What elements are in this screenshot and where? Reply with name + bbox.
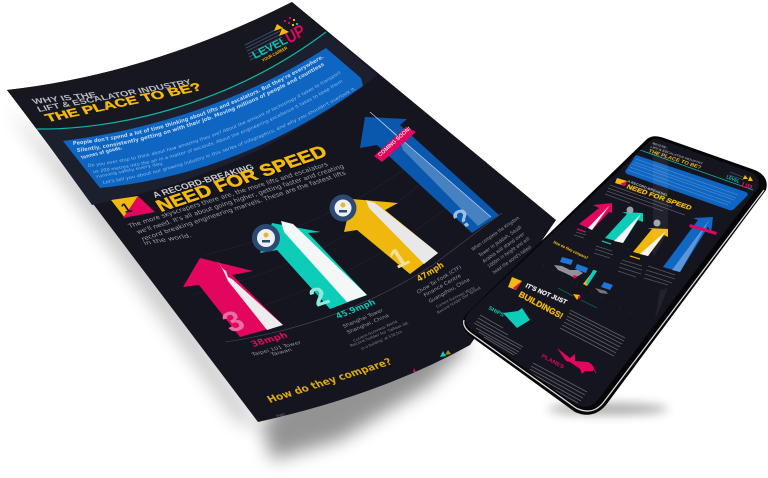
intro small text: us 200 metres into the air in a matter of seconds. About the engineering excellence it takes to keep them [93,80,342,173]
chart: blue arrow, Kingdom Tower: ? [446,202,479,235]
screen heading: compare: How do they compare? [552,240,590,260]
heading: why is the: LIFT & ESCALATOR INDUSTRY [35,77,194,114]
screen logo: UP [740,181,754,192]
screen body lines [605,185,685,215]
chart: teal arrow, Shanghai Tower: 2 [303,281,335,312]
label: 47mph: 47mph [415,260,446,284]
label: 47mph: Chow Tai Fook (CTF) [416,265,463,296]
heading: why is the [30,77,204,125]
screen labels [574,232,675,285]
badge: section 1 [111,196,155,218]
body copy: The more skyscrapers there are, the more lifts and escalators [126,161,330,230]
chart: yellow arrow, CTF Finance Centre: 1 [383,242,414,274]
screen speed label: pink [577,229,586,232]
label: 47mph [415,260,482,315]
label: 45.9mph: Shanghai, China [346,313,391,336]
screen badge 2 [508,277,522,290]
screen blue arrow [663,217,717,272]
phone shadow [548,403,668,415]
screen pink arrow [579,203,612,230]
axis label: mph: mph [275,412,287,418]
screen heading: not just buildings: IT'S NOT JUST [524,283,568,306]
chart: blue arrow, Kingdom Tower [360,112,499,235]
screen logo [726,172,753,189]
phone body [463,136,767,415]
teal divider [37,32,326,129]
note: Kingdom Tower: Tower in Jeddah, Saudi [477,225,523,259]
screen ships [474,305,530,355]
note: Kingdom Tower: Arabia will stand over [482,231,526,265]
logo: level up: UP [282,21,308,48]
label: 38mph [249,331,304,358]
intro band [37,32,378,205]
body copy: in the world. [142,233,193,247]
baseline rule [225,213,502,342]
screen text block [560,310,625,356]
phone screen [465,139,759,407]
label: 45.9mph: Shanghai Tower [342,307,386,330]
screen speed label: yellow [630,256,640,259]
paper shadow: bottom edge [262,300,470,460]
heading: need for speed: NEED FOR SPEED [153,143,332,216]
banner: coming soon: COMING SOON! [377,126,413,158]
screen content [474,141,754,403]
intro small text: Do you ever stop to think about how amazing they are? About the amount of technology it takes to transport [88,71,341,167]
badge: guinness, CTF Finance Centre [330,194,356,222]
badge: section 1: 1 [118,201,135,216]
heading: need for speed: A RECORD-BREAKING [151,162,256,200]
body copy: we'll need. It's all about going higher, getting faster and creating [135,163,346,236]
label: 45.9mph: 45.9mph [334,297,377,321]
intro bold text: tonnes of goods. [80,145,124,161]
screen heading: THE PLACE TO BE? [647,149,702,171]
label: 45.9mph [334,297,410,351]
header band [7,2,326,129]
intro small text: running safely every day. [95,161,165,180]
screen logo: LEVEL [725,174,740,185]
label: 38mph: 38mph [249,331,290,349]
logo: level up [245,17,308,63]
label: 47mph: Current Guinness World [435,285,476,309]
screen chart [543,257,640,318]
screen yellow arrow [633,220,668,256]
screen teal arrow [605,206,643,243]
screen heading: not just buildings: BUILDINGS! [517,289,565,321]
phone chrome edge [464,190,764,411]
label: 45.9mph: in a building' at 578.5m [360,329,403,351]
heading: why is the: WHY IS THE [30,90,99,106]
heading: why is the: THE PLACE TO BE? [42,80,204,125]
screen heading [649,142,703,169]
screen heading: LIFT & ESCALATOR INDUSTRY [649,145,704,165]
label: 47mph: Guangzhou, China [428,277,471,305]
label: 38mph: Taipei 101 Tower [250,340,304,358]
heading: how do they compare: How do they compare? [265,356,395,405]
screen heading: need for speed: A RECORD-BREAKING [626,179,668,197]
phone mockup [463,136,767,415]
heading: need for speed: NEED FOR SPEED [152,142,331,215]
panel: poster sheet [7,2,556,422]
paper shadow: left edge [8,108,262,430]
label: 47mph: Record holder (for Tallest [436,285,482,315]
screen speed label: teal [602,241,611,244]
screen ships: SHIPS [487,305,505,319]
panel: blue intro box [63,48,363,188]
screen heading: need for speed: NEED FOR SPEED [625,184,693,212]
screen heading: WHY IS THE [651,141,667,149]
logo: level up: LEVEL [250,35,290,61]
screen badge 1 [615,178,627,186]
intro small text: Let's tell you about our growing industry in this series of infographics, and why you shouldn't overlook it. [103,88,356,184]
note: Kingdom Tower: boast the world's tallest [492,245,533,276]
note: Kingdom Tower: 1000m in height and will [487,236,531,270]
note: Kingdom Tower [471,215,533,276]
label: 45.9mph: Record holder for 'tallest lift [349,321,410,348]
chart: pink arrow, Taipei 101: 3 [216,304,251,339]
badge: guinness, Shanghai Tower [252,224,280,252]
screen planes: PLANES [540,353,565,371]
screen planes [528,348,596,403]
intro bold text: Silently, consistently getting on with their job. Moving millions of people and countless [77,63,324,152]
label: 45.9mph: Current Guinness World [352,319,399,343]
chart: pink arrow, Taipei 101 [183,258,283,339]
chart fragments [413,350,451,372]
screen intro box [625,155,748,210]
label: 47mph: Finance Centre [423,273,463,299]
logo: level up: YOUR CAREER [261,45,289,63]
label: 38mph: Taiwan [269,347,293,358]
body copy: record breaking engineering marvels. These are the fastest lifts [140,170,347,243]
screen reflection [653,142,668,320]
chart: teal arrow, Shanghai Tower [260,221,367,312]
note: Kingdom Tower: When complete the Kingdom [471,215,521,253]
intro bold text: People don't spend a lot of time thinking about lifts and escalators. But they're everywhere. [73,56,324,145]
chart: yellow arrow, CTF Finance Centre [344,199,438,274]
